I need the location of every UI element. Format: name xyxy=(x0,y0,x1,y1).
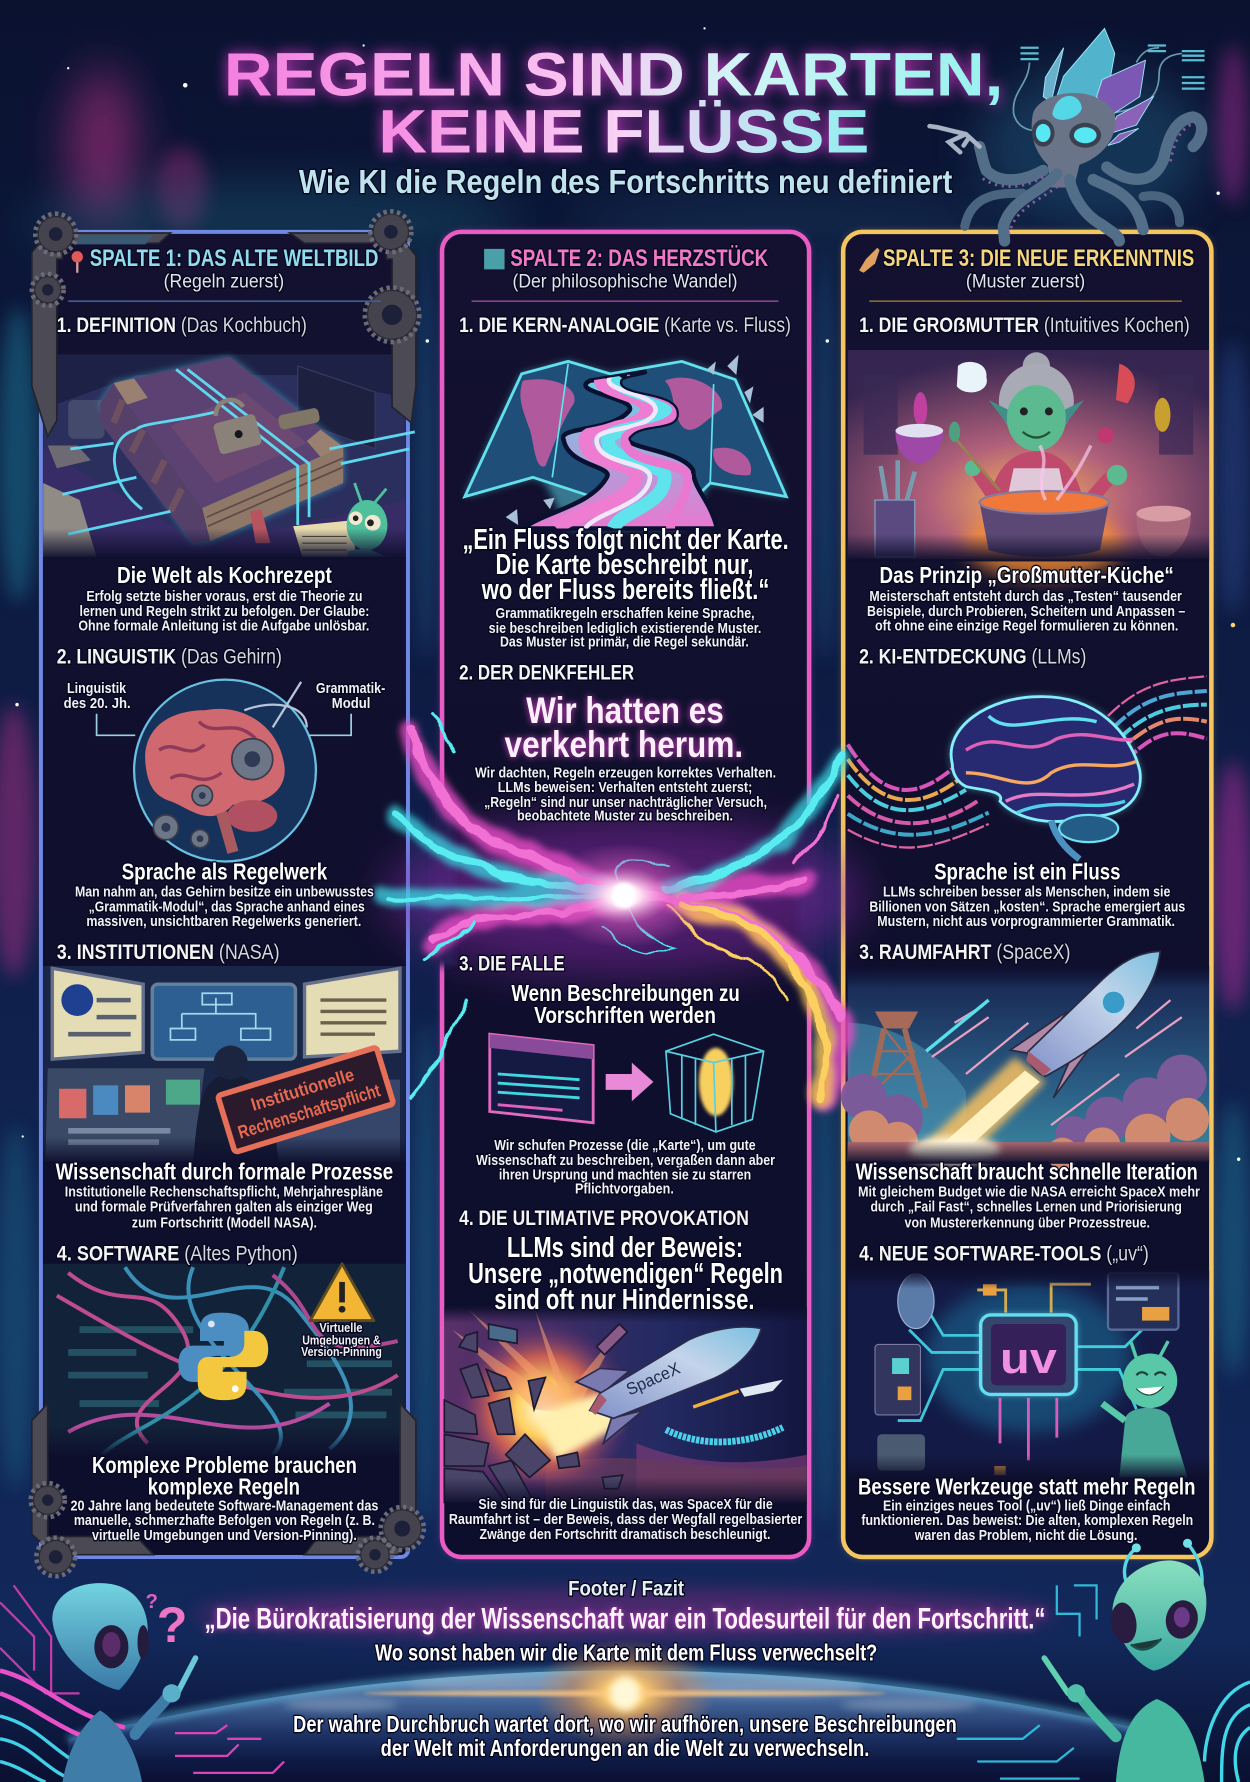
icon: pink question marks: ? xyxy=(145,1590,158,1613)
column heading: SPALTE 2: DAS HERZSTÜCK xyxy=(510,245,769,272)
section: ki-entdeckung: Mustern, nicht aus vorprogrammierter Grammatik. xyxy=(877,914,1175,930)
section: institutionen: und formale Prüfverfahren galten als einziger Weg xyxy=(75,1199,373,1215)
icon: pin xyxy=(72,251,83,273)
section: linguistik xyxy=(57,644,374,930)
subtitle: Wie KI die Regeln des Fortschritts neu definiert xyxy=(299,163,952,200)
column heading: (Regeln zuerst) xyxy=(164,272,284,293)
illustration: uv chip and tools: uv xyxy=(1000,1335,1057,1383)
footer text: Wo sonst haben wir die Karte mit dem Fluss verwechselt? xyxy=(375,1639,877,1665)
section: falle: Wenn Beschreibungen zu xyxy=(511,980,740,1006)
stamp: Institutionelle Rechenschaftspflicht: Institutionelle xyxy=(249,1065,357,1115)
section: provokation xyxy=(449,1205,802,1543)
section: ki-entdeckung xyxy=(859,644,1185,930)
footer text: Footer / Fazit xyxy=(568,1576,684,1601)
section: denkfehler: 2. DER DENKFEHLER xyxy=(459,660,634,685)
section: grossmutter xyxy=(859,312,1190,635)
column heading: SPALTE 1: DAS ALTE WELTBILD xyxy=(90,245,378,272)
column heading: (Muster zuerst) xyxy=(966,272,1085,293)
illustration: NASA control room xyxy=(43,966,406,1164)
icon: document window xyxy=(490,1034,593,1123)
illustration: rocket breaking wall xyxy=(444,1307,807,1505)
section: grossmutter: 1. DIE GROẞMUTTER (Intuitives Kochen) xyxy=(859,312,1190,337)
section: linguistik: 2. LINGUISTIK (Das Gehirn) xyxy=(57,644,282,669)
section: kern-analogie: Die Karte beschreibt nur, xyxy=(495,549,753,581)
section: definition: Die Welt als Kochrezept xyxy=(117,562,332,588)
section: linguistik: Man nahm an, das Gehirn besitze ein unbewusstes xyxy=(75,885,374,901)
section: raumfahrt: Mit gleichem Budget wie die NASA erreicht SpaceX mehr xyxy=(858,1185,1200,1201)
section: denkfehler: verkehrt herum. xyxy=(505,723,743,765)
section: falle: 3. DIE FALLE xyxy=(459,951,565,976)
footer text: Der wahre Durchbruch wartet dort, wo wir aufhören, unsere Beschreibungen xyxy=(293,1711,957,1737)
section: software-tools: 4. NEUE SOFTWARE-TOOLS („uv“) xyxy=(859,1240,1149,1265)
section: software-tools: Ein einziges neues Tool („uv“) ließ Dinge einfach xyxy=(883,1498,1170,1514)
section: definition: lernen und Regeln strikt zu befolgen. Der Glaube: xyxy=(80,604,369,620)
section: software xyxy=(57,1240,378,1544)
stamp: Institutionelle Rechenschaftspflicht xyxy=(218,1047,394,1152)
section: grossmutter: Meisterschaft entsteht durch das „Testen“ tausender xyxy=(869,589,1182,605)
icon: bulb in cage xyxy=(666,1034,764,1132)
column 3 text xyxy=(856,245,1200,1544)
section: linguistik: „Grammatik-Modul“, das Sprache anhand eines xyxy=(89,899,365,915)
section: falle: Wissenschaft zu beschreiben, vergaßen dann aber xyxy=(476,1153,775,1169)
column heading xyxy=(472,245,778,301)
section: software: 20 Jahre lang bedeutete Software-Management das xyxy=(70,1498,378,1514)
label: grammatik bracket xyxy=(309,681,385,735)
column heading xyxy=(68,245,381,301)
section: denkfehler: „Regeln“ sind nur unser nachträglicher Versuch, xyxy=(484,795,767,811)
rocket body: SpaceX xyxy=(623,1359,683,1399)
section: provokation: Sie sind für die Linguistik das, was SpaceX für die xyxy=(478,1497,773,1513)
section: raumfahrt: durch „Fail Fast“, schnelles Lernen und Priorisierung xyxy=(870,1199,1182,1215)
section: provokation: LLMs sind der Beweis: xyxy=(507,1232,743,1264)
section: software: manuelle, schmerzhafte Befolgen von Regeln (z. B. xyxy=(74,1513,375,1529)
illustration: neural brain with language waves xyxy=(848,676,1207,859)
head xyxy=(1032,93,1115,188)
circuit lines xyxy=(0,1585,1250,1782)
column 2 text xyxy=(449,245,802,1543)
character: robot squid xyxy=(930,28,1205,241)
section: denkfehler xyxy=(459,660,776,825)
illustration: descriptions become cage xyxy=(490,1034,764,1132)
footer text: der Welt mit Anforderungen an die Welt zu verwechseln. xyxy=(381,1735,869,1761)
section: grossmutter: oft ohne eine einzige Regel formulieren zu können. xyxy=(875,619,1178,635)
character: curious alien left xyxy=(52,1583,195,1782)
footer text xyxy=(205,1576,1045,1761)
label: grammatik bracket: Grammatik- xyxy=(316,681,385,697)
section: kern-analogie: sie beschreiben lediglich existierende Muster. xyxy=(489,621,761,637)
panel: Spalte 1 xyxy=(41,232,408,1557)
section: ki-entdeckung: 2. KI-ENTDECKUNG (LLMs) xyxy=(859,644,1086,669)
launch tower xyxy=(869,1011,926,1108)
title: KEINE FLÜSSE xyxy=(378,97,869,166)
icon: pink question marks xyxy=(145,1590,188,1653)
icon: pink question marks: ? xyxy=(157,1597,188,1653)
section: definition: Erfolg setzte bisher voraus, erst die Theorie zu xyxy=(86,589,363,605)
glow behind book xyxy=(100,357,343,543)
illustration: brain in glass globe xyxy=(64,680,385,861)
section: software: komplexe Regeln xyxy=(148,1473,300,1499)
section: denkfehler: Wir hatten es xyxy=(526,689,724,731)
panel: Spalte 3 xyxy=(843,232,1211,1557)
section: denkfehler: LLMs beweisen: Verhalten entsteht zuerst; xyxy=(498,780,752,796)
section: software: virtuelle Umgebungen und Version-Pinning). xyxy=(92,1528,357,1544)
section: kern-analogie: Grammatikregeln erschaffen keine Sprache, xyxy=(495,606,755,622)
footer scene: planet horizon xyxy=(0,1585,1250,1782)
section: institutionen: 3. INSTITUTIONEN (NASA) xyxy=(57,939,280,964)
section: falle xyxy=(459,951,775,1197)
illustration: python cable tangle xyxy=(43,1264,406,1457)
label: linguistik bracket: des 20. Jh. xyxy=(64,696,131,712)
label: linguistik bracket xyxy=(64,681,135,735)
section: software-tools: waren das Problem, nicht die Lösung. xyxy=(914,1528,1138,1544)
title: REGELN SIND KARTEN, xyxy=(224,40,1003,109)
panel-border gaps under the burst xyxy=(432,796,455,966)
section: institutionen xyxy=(56,939,393,1231)
character: smiling alien right xyxy=(1044,1539,1206,1782)
section: denkfehler: Wir dachten, Regeln erzeugen korrektes Verhalten. xyxy=(475,765,776,781)
section: denkfehler: beobachtete Muster zu beschreiben. xyxy=(517,809,733,825)
section: definition xyxy=(57,312,369,635)
section: falle: ihren Ursprung und machten sie zu starren xyxy=(499,1168,751,1184)
rocket body xyxy=(1010,951,1160,1098)
section: grossmutter: Beispiele, durch Probieren, Scheitern und Anpassen – xyxy=(867,604,1185,620)
section: falle: Pflichtvorgaben. xyxy=(575,1181,674,1197)
section: raumfahrt: von Mustererkennung über Prozesstreue. xyxy=(905,1215,1150,1231)
section: falle: Vorschriften werden xyxy=(534,1002,716,1028)
back tentacles xyxy=(965,193,1180,226)
illustration: uv chip and tools xyxy=(848,1271,1209,1480)
smoke clouds xyxy=(841,1055,1209,1169)
section: ki-entdeckung: Sprache ist ein Fluss xyxy=(934,859,1120,885)
stamp: Institutionelle Rechenschaftspflicht: Rechenschaftspflicht xyxy=(236,1080,383,1143)
column heading: (Der philosophische Wandel) xyxy=(512,272,738,293)
section: ki-entdeckung: Billionen von Sätzen „kosten“. Sprache emergiert aus xyxy=(869,899,1185,915)
column heading xyxy=(869,245,1194,301)
section: provokation: Unsere „notwendigen“ Regeln xyxy=(468,1258,783,1290)
illustration: launching rocket xyxy=(841,951,1209,1169)
section: software: Komplexe Probleme brauchen xyxy=(92,1452,357,1478)
section: definition: 1. DEFINITION (Das Kochbuch) xyxy=(57,312,307,337)
column 1 text xyxy=(56,245,393,1544)
section: kern-analogie: „Ein Fluss folgt nicht der Karte. xyxy=(463,524,789,556)
section: software-tools: funktionieren. Das beweist: Die alten, komplexen Regeln xyxy=(861,1513,1193,1529)
section: software-tools xyxy=(858,1240,1195,1544)
label: grammatik bracket: Modul xyxy=(332,696,370,712)
section: provokation: Zwänge den Fortschritt dramatisch beschleunigt. xyxy=(480,1527,770,1543)
section: kern-analogie: wo der Fluss bereits fließt.“ xyxy=(481,574,769,606)
illustration: map torn by river xyxy=(465,355,786,528)
illustration: grandmother cooking xyxy=(848,350,1209,577)
label: warning caption xyxy=(301,1320,382,1359)
label: warning caption: Version-Pinning xyxy=(301,1344,382,1359)
panel: Spalte 2 xyxy=(442,232,809,1557)
section: raumfahrt xyxy=(856,939,1200,1231)
section: institutionen: zum Fortschritt (Modell NASA). xyxy=(132,1215,317,1231)
section: linguistik: Sprache als Regelwerk xyxy=(122,859,328,885)
section: kern-analogie: 1. DIE KERN-ANALOGIE (Karte vs. Fluss) xyxy=(459,312,791,337)
section: falle: Wir schufen Prozesse (die „Karte“), um gute xyxy=(494,1138,756,1154)
title xyxy=(224,40,1003,166)
section: provokation: sind oft nur Hindernisse. xyxy=(494,1284,755,1316)
section: institutionen: Wissenschaft durch formale Prozesse xyxy=(56,1159,393,1185)
section: provokation: Raumfahrt ist – der Beweis, dass der Wegfall regelbasierter xyxy=(449,1512,802,1528)
label: warning caption: Virtuelle xyxy=(319,1320,363,1335)
energy burst in the centre xyxy=(385,710,862,1100)
arrow: to cage xyxy=(606,1063,653,1101)
section: raumfahrt: 3. RAUMFAHRT (SpaceX) xyxy=(859,939,1070,964)
section: institutionen: Institutionelle Rechenschaftspflicht, Mehrjahrespläne xyxy=(65,1185,383,1201)
front tentacles xyxy=(980,117,1202,241)
section: definition: Ohne formale Anleitung ist die Aufgabe unlösbar. xyxy=(78,619,369,635)
illustration: locked rule book xyxy=(43,355,415,559)
section: linguistik: massiven, unsichtbaren Regelwerks generiert. xyxy=(86,914,361,930)
section: kern-analogie: Das Muster ist primär, die Regel sekundär. xyxy=(500,635,749,651)
icon: warning triangle xyxy=(310,1264,374,1321)
frame: steampunk metal corners of Spalte 1 xyxy=(31,211,424,1576)
label: warning caption: Umgebungen & xyxy=(302,1332,381,1347)
rocket body xyxy=(576,1327,761,1443)
section: software: 4. SOFTWARE (Altes Python) xyxy=(57,1240,298,1265)
icon: map xyxy=(484,249,505,269)
label: linguistik bracket: Linguistik xyxy=(67,681,127,697)
section: provokation: 4. DIE ULTIMATIVE PROVOKATION xyxy=(459,1205,749,1230)
icon: python logo xyxy=(178,1313,268,1400)
section: kern-analogie xyxy=(459,312,791,651)
section: ki-entdeckung: LLMs schreiben besser als Menschen, indem sie xyxy=(883,885,1170,901)
icon: small rocket xyxy=(859,248,880,273)
section: grossmutter: Das Prinzip „Großmutter-Küche“ xyxy=(880,562,1174,588)
